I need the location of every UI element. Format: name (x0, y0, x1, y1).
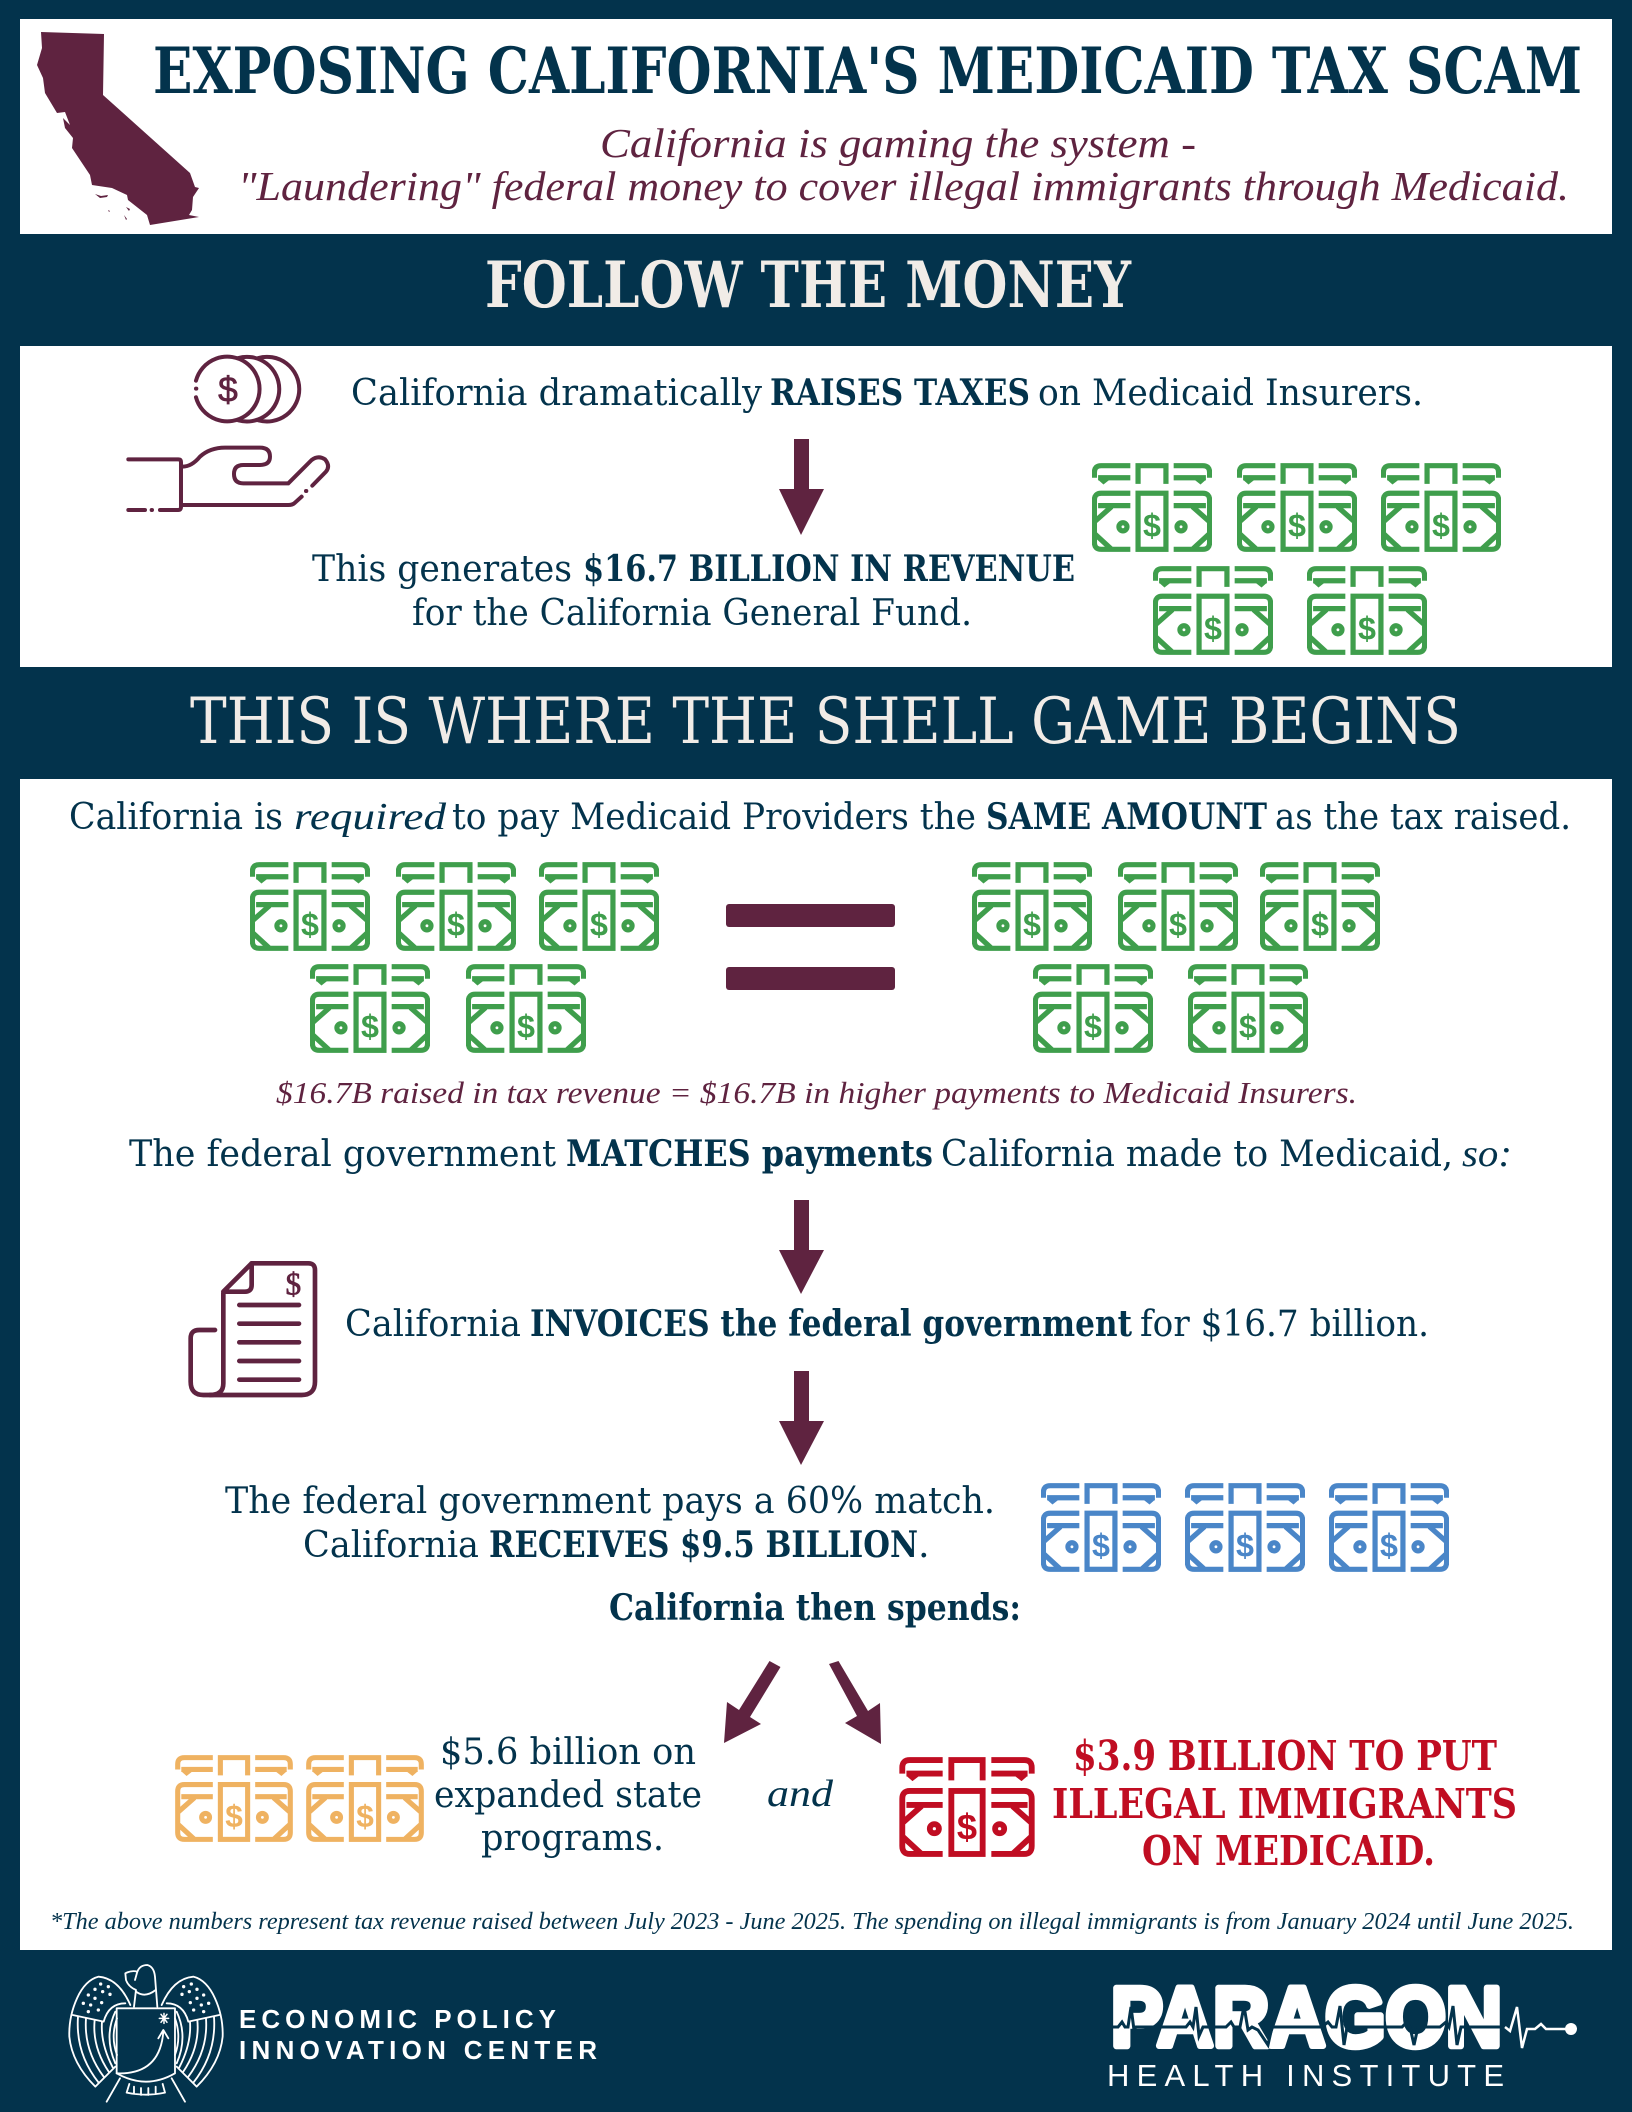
equals sign (726, 904, 895, 990)
wordmark: Health Institute: HEALTH INSTITUTE (1107, 2058, 1504, 2093)
text: raises taxes: California dramatically (351, 371, 762, 414)
text: 60% match: RECEIVES $9.5 BILLION (489, 1523, 918, 1566)
arrow down (779, 439, 824, 535)
text: invoices: California (345, 1302, 521, 1345)
logo: Economic Policy Innovation Center (69, 1965, 597, 2102)
arrow: down left (724, 1661, 780, 1743)
text: raises taxes: RAISES TAXES (770, 371, 1030, 414)
icon: invoice (191, 1263, 315, 1395)
text: state programs: $5.6 billion on (440, 1730, 696, 1773)
icon: red money (902, 1760, 1032, 1854)
wordmark: INNOVATION CENTER (239, 2035, 597, 2065)
caption: $16.7B raised in tax revenue = $16.7B in higher payments to Medicaid Insurers. (276, 1075, 1357, 1110)
text: revenue: for the California General Fund. (412, 591, 972, 634)
wordmark (239, 2004, 597, 2065)
text: then spends: California then spends: (609, 1586, 1021, 1629)
text: required to pay: as the tax raised. (1275, 795, 1571, 838)
text: matches: California made to Medicaid, (941, 1132, 1453, 1175)
panel: taxes (20, 346, 1612, 667)
text: state programs (434, 1730, 702, 1859)
heartbeat line extension (1505, 2007, 1570, 2048)
panel: header (20, 19, 1612, 234)
text: matches: so: (1462, 1133, 1512, 1175)
text: 60% match: The federal government pays a 60% match. (225, 1479, 995, 1522)
text: required to pay: to pay Medicaid Providers the (452, 795, 976, 838)
arrow down (779, 1200, 824, 1294)
text: raises taxes (351, 371, 1423, 414)
icon: hand with coins (128, 357, 328, 510)
text: illegal immigrants (1052, 1732, 1517, 1875)
icons: money left group (252, 865, 657, 1050)
text: 60% match: . (918, 1523, 930, 1566)
text: required to pay: SAME AMOUNT (986, 795, 1267, 838)
text: revenue (312, 547, 1075, 634)
text: required to pay (69, 795, 1571, 838)
text: required to pay: California is (69, 795, 283, 838)
text: state programs: programs. (481, 1816, 664, 1859)
logo: Paragon Health Institute (1107, 1970, 1577, 2093)
icon: California map (37, 32, 199, 225)
icon: eagle (69, 1965, 223, 2102)
text: matches: MATCHES payments (566, 1132, 933, 1175)
text: and: and (767, 1773, 834, 1815)
icons: orange money (178, 1758, 421, 1839)
heartbeat dot (1565, 2023, 1577, 2035)
text: illegal immigrants: $3.9 BILLION TO PUT (1073, 1732, 1497, 1780)
footnote: *The above numbers represent tax revenue raised between July 2023 - June 2025. The spending on illegal immigrants is from January 2024 until June 2025. (50, 1909, 1574, 1935)
panel: shell game (20, 779, 1612, 1950)
text: revenue: This generates (312, 547, 572, 590)
subtitle: California is gaming the system - (600, 120, 1196, 166)
text: required to pay: required (294, 796, 447, 838)
subtitle: "Laundering" federal money to cover illegal immigrants through Medicaid. (238, 163, 1569, 209)
heartbeat line on letters (1108, 2006, 1505, 2045)
text: illegal immigrants: ILLEGAL IMMIGRANTS (1052, 1780, 1517, 1828)
icons: green money (1094, 466, 1499, 652)
icon: hand with coins: $ (218, 370, 238, 409)
heading: shell game: THIS IS WHERE THE SHELL GAME BEGINS (190, 685, 1461, 759)
text: illegal immigrants: ON MEDICAID. (1142, 1827, 1435, 1875)
icons: blue money (1043, 1486, 1447, 1569)
text: revenue: $16.7 BILLION IN REVENUE (583, 547, 1075, 590)
icons: money right group (974, 865, 1378, 1050)
text: 60% match: California (303, 1523, 479, 1566)
text: 60% match (225, 1479, 995, 1566)
arrow down (779, 1371, 824, 1465)
icon: invoice: $ (285, 1267, 301, 1302)
text: invoices: INVOICES the federal government (530, 1302, 1132, 1345)
text: state programs: expanded state (434, 1773, 702, 1816)
heading: follow the money: FOLLOW THE MONEY (485, 248, 1132, 323)
text: invoices (345, 1302, 1429, 1345)
text: raises taxes: on Medicaid Insurers. (1038, 371, 1423, 414)
subtitle (238, 120, 1569, 209)
text: matches: The federal government (129, 1132, 556, 1175)
text: matches (129, 1132, 1512, 1175)
wordmark: ECONOMIC POLICY (239, 2004, 556, 2034)
arrow: down right (829, 1661, 881, 1744)
wordmark: Paragon: PARAGON (1111, 1970, 1502, 2064)
text: invoices: for $16.7 billion. (1140, 1302, 1429, 1345)
